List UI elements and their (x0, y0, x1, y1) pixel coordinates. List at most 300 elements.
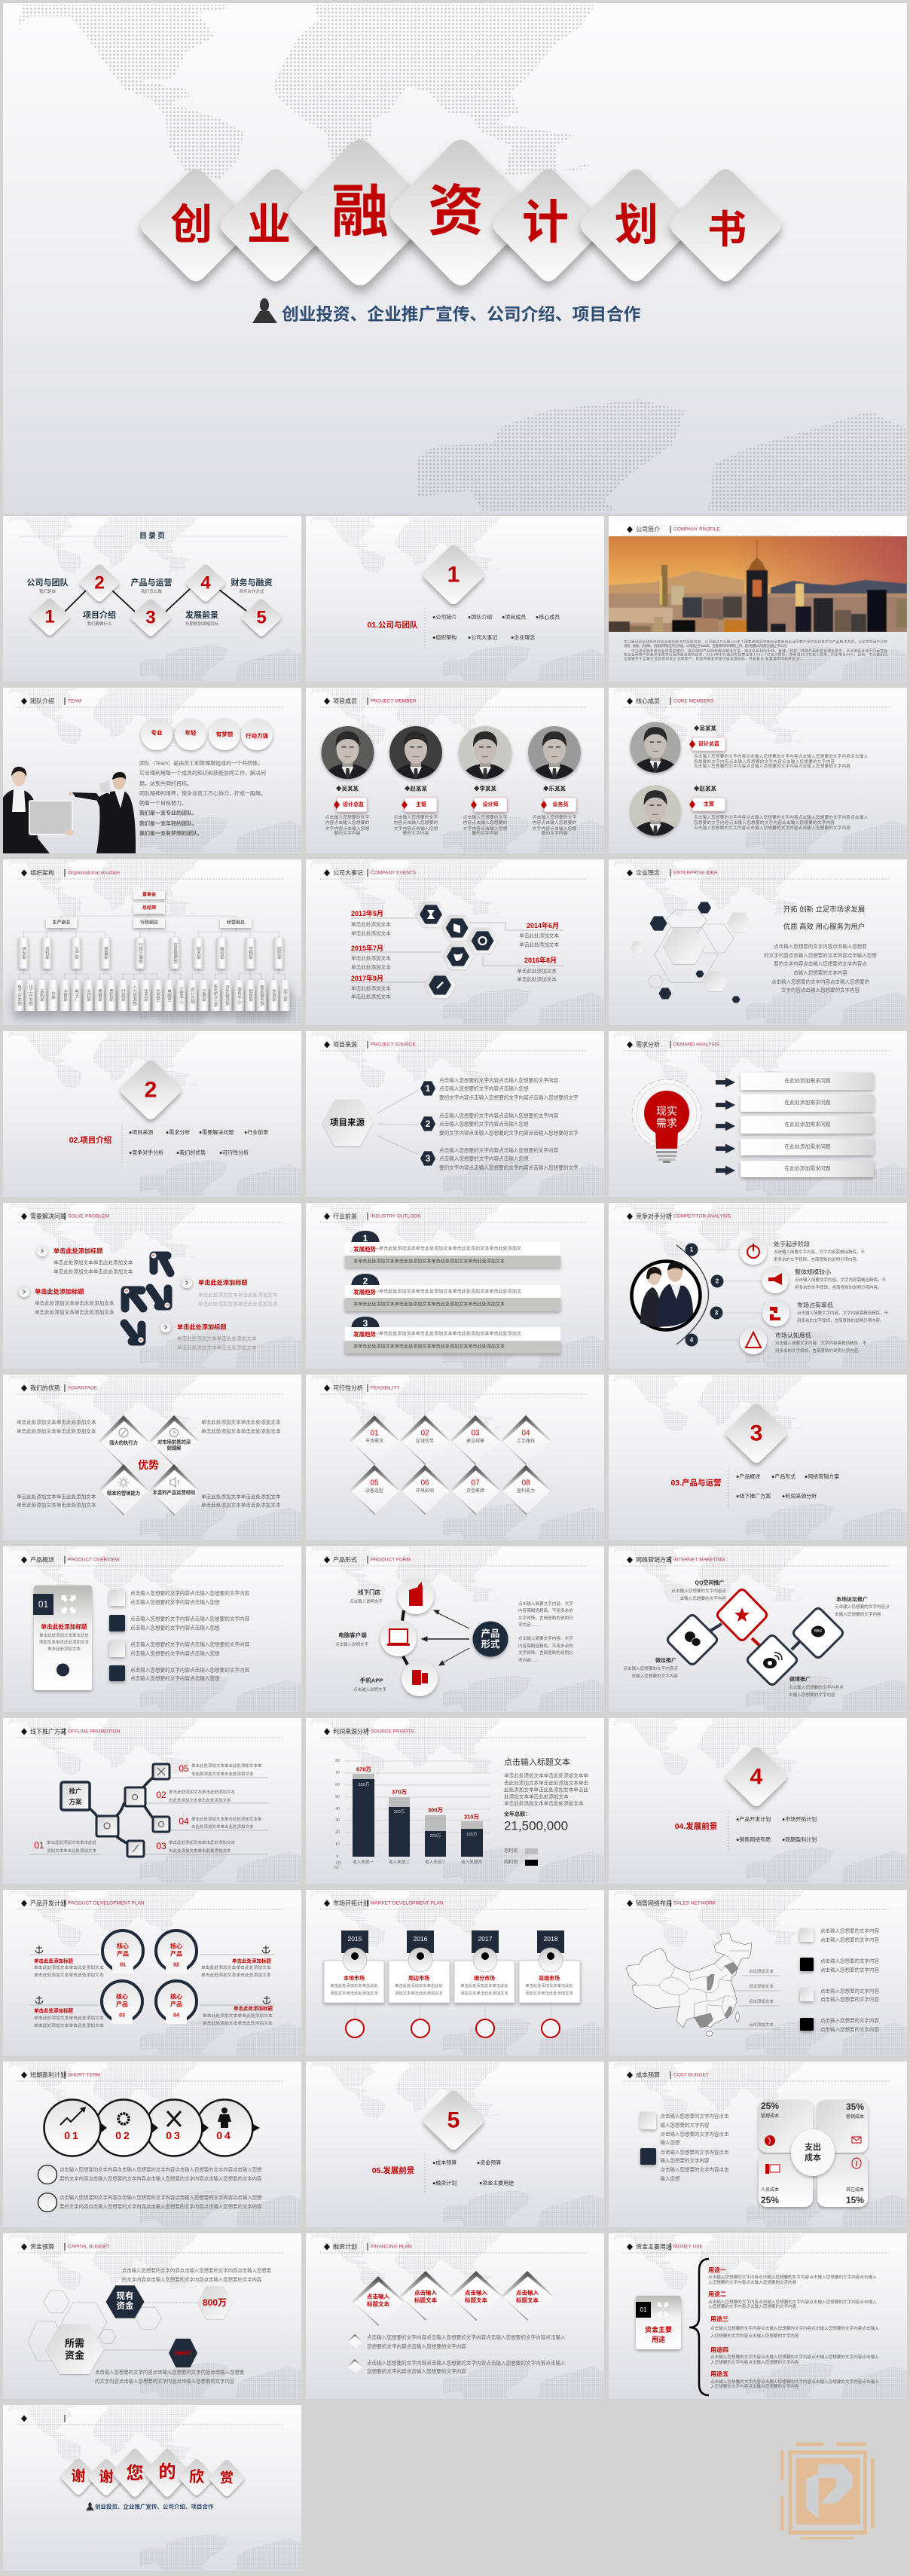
heading: 产品形式 (333, 1556, 357, 1564)
keyword circles: 专业 (151, 729, 163, 737)
heading (623, 869, 890, 879)
heading: COMPANY EVENTS (371, 871, 417, 875)
panel: feasibility (306, 1375, 604, 1540)
panel: market development plan (306, 1890, 604, 2056)
bar chart: 70 (335, 1771, 340, 1775)
heading: INDUSTRY OUTLOOK (371, 1214, 421, 1219)
photo: city skyline at sunset (609, 536, 907, 632)
market texts: 添加文本单击此处添加文本 (395, 1990, 443, 1996)
competitor texts: 点击输入简要文字内容。文字内容需概括精炼，不 (797, 1310, 889, 1316)
map callouts (714, 1968, 780, 2029)
competitor texts: 用多余的文字修饰，言简意赅的说明分项内容。 (795, 1284, 882, 1290)
team description: 它合理利用每一个成员的知识和技能协同工作，解决问 (139, 770, 266, 776)
bar chart: 300万 (428, 1806, 444, 1814)
numbered texts: 01 (34, 1840, 44, 1851)
heading: 线下推广方案 (30, 1728, 66, 1735)
bar chart: 50 (335, 1795, 340, 1799)
department labels: 行政人事部 (138, 942, 143, 965)
advantage labels: 丰富的产品运营经验 (153, 1488, 196, 1496)
panel: financing plan (306, 2233, 604, 2399)
center circle: 支出 (805, 2141, 821, 2152)
outlined diamonds (667, 1590, 843, 1685)
demand arrows (716, 1077, 735, 1176)
annual total (504, 1811, 568, 1833)
plan texts: 单击此处添加文本单击此处添加文本 (34, 1972, 104, 1978)
sub department labels (17, 984, 288, 1007)
year tags: 2015 (348, 1935, 362, 1943)
heading: ADVANTAGE (68, 1386, 98, 1390)
source lines (377, 1090, 419, 1155)
member one: 您想要的文字内容点击输入您想要的文字内容点击输入您想要的文字内容 (694, 758, 835, 765)
product card (33, 1586, 92, 1690)
heading (623, 1556, 890, 1566)
numbered hexagons: 1 (426, 1083, 431, 1094)
legend texts: 输入您想 (660, 2175, 680, 2181)
member one: 点击输入您想要的文字内容点击输入您想要的文字内容点击输入您想要的文字内容 (694, 763, 850, 769)
heading: 核心成员 (636, 697, 660, 705)
numbered dots: 2 (716, 1277, 719, 1285)
cost labels (761, 2101, 864, 2205)
outlook row 3: 本单击此处添加文本单击此处添加文本单击此处添加文本单击此处添加文本 (353, 1344, 505, 1350)
form description: 点击输入简要文字内容。文字 (518, 1601, 573, 1607)
year tags (341, 1930, 564, 1953)
feature texts: 点击输入您想要的文字内容点击输入您想 (130, 1624, 220, 1631)
feasibility labels: 04 (521, 1430, 530, 1437)
member names (336, 785, 566, 792)
plan notes: 要的文字内容点击输入您想要的文字内容点击输入您想要的文字内容点击输入您想要的文字内容 (60, 2175, 262, 2181)
section list: ●资金主要用途 (479, 2180, 514, 2186)
advantage descriptions: 单击此处添加文本单击此处添加文本 (201, 1428, 281, 1434)
role badges: 主管 (416, 801, 426, 807)
member names: ◆赵某某 (405, 785, 427, 792)
numbered hexagons: 3 (426, 1153, 431, 1164)
legend (504, 1848, 538, 1866)
advantage descriptions: 单击此处添加文本单击此处添加文本 (17, 1428, 96, 1434)
bar chart: 元） (334, 1866, 341, 1870)
title diamonds: 业 (247, 200, 291, 250)
cost labels: 管理成本 (761, 2113, 779, 2119)
existing capital hexagons: 资金 (116, 2300, 134, 2311)
chart description: 此处添加文本单击此处添加文本单击此 (504, 1787, 588, 1793)
panel: team (3, 688, 301, 853)
left events: 单击此处添加文本 (351, 955, 391, 961)
section list: ●成本预算 (432, 2159, 457, 2166)
outlook row 3: 发展趋势--单击此处添加文本单击此处添加文本单击此处添加文本单击此处添加文 (353, 1330, 521, 1338)
member two: 点击输入您想要的文字内容点击输入您想要的文字内容点击输入您想要的文字内容 (694, 825, 850, 831)
feasibility labels: 02 (420, 1430, 429, 1437)
plan texts: 单击此处添加文本单击此处添加文本 (34, 1964, 104, 1970)
marketing labels: 点击输入您想要的文字内容点 (671, 1588, 726, 1594)
sub department labels: 总务室 (155, 988, 160, 1002)
chapter labels (27, 577, 273, 627)
advantage labels: 精准的营销能力 (107, 1490, 140, 1496)
heading: PROJECT SOURCE (371, 1042, 416, 1047)
marketing labels (623, 1579, 890, 1698)
uses list: 点击输入您想要的文字内容点击输入您想要的文字内容点击输入您想要的文字内容点击输入 (708, 2274, 877, 2280)
sub department labels: 仓库 (50, 990, 56, 1000)
section list (432, 613, 560, 640)
section title: 03.产品与运营 (670, 1478, 722, 1488)
panel: offline promotion (3, 1718, 301, 1884)
marketing labels: 微博推广 (789, 1675, 811, 1683)
legend texts: 点击输入您想要的文字内容 (820, 1966, 880, 1973)
right events: 单击此处添加文本 (519, 942, 559, 948)
slogans: 优质 高效 用心服务为用户 (783, 922, 865, 931)
step circles (44, 2100, 260, 2156)
advantage descriptions: 单击此处添加文本单击此处添加文本 (17, 1419, 96, 1425)
panel: section 3 (609, 1375, 907, 1540)
heading: MARKET DEVELOPMENT PLAN (371, 1901, 444, 1906)
heading: 成本预算 (636, 2071, 660, 2079)
sub department labels: 会计出纳 (190, 986, 195, 1005)
center circle: 形式 (481, 1638, 500, 1650)
section list: ●资金预算 (477, 2159, 501, 2166)
chart description (504, 1772, 588, 1806)
map of China (626, 1934, 752, 2036)
center circle: 产品 (481, 1628, 500, 1639)
idea description: 文字内容点击输入您想要的文字内容 (781, 987, 860, 993)
advantage labels: 对市场前景的深 (157, 1439, 191, 1445)
uses list: 用途三 (710, 2315, 728, 2323)
member one: 设计总监 (698, 740, 719, 747)
market texts: 细分市场 (474, 1975, 495, 1981)
competitor texts (774, 1240, 889, 1354)
core product circles: 产品 (170, 2001, 182, 2008)
product card: 添加文本单击此处添加文本 (39, 1639, 89, 1645)
competitor texts: 点击输入简要文字内容。文字内容需概括精炼，不 (795, 1277, 887, 1283)
feasibility labels: 环境影响 (416, 1488, 434, 1494)
heading (320, 1041, 587, 1051)
plan texts: 单击此处添加标题 (234, 2005, 273, 2011)
existing capital hexagons (105, 2285, 232, 2319)
section list: ●项目成员 (502, 613, 526, 621)
panel: product overview (3, 1546, 301, 1712)
heading (320, 2243, 587, 2253)
numbered texts: 05 (179, 1763, 189, 1774)
heading: Organizational structure (68, 871, 120, 875)
section title: 04.发展前景 (675, 1821, 717, 1831)
numbered diamonds: 4 (200, 572, 211, 594)
heading (17, 1384, 284, 1394)
top level boxes (46, 891, 252, 928)
feasibility labels: 01 (370, 1430, 379, 1437)
role badges: 业务员 (553, 801, 568, 807)
form description: 文字修饰。言简意赅的说明分 (518, 1615, 573, 1621)
bar chart: 收入来源一 (353, 1859, 374, 1865)
source texts: 点击输入您想要的文字内容点击输入您想要的文字内容 (439, 1112, 559, 1119)
capital descriptions: 点击输入您想要的文字内容点击输入您想要的文字内容点击输入您想要 (122, 2267, 272, 2273)
required capital hexagons: 2000万 (174, 2350, 193, 2356)
section list: ●市场开拓计划 (782, 1815, 817, 1823)
member descriptions: 点击输入您想要的文字 (325, 814, 370, 820)
numbered texts: 04 (179, 1816, 189, 1827)
team description: 朝着一个目标努力。 (139, 800, 187, 806)
financing labels: 点击输入 (414, 2288, 437, 2296)
department labels: 质量部 (103, 946, 108, 960)
chart description: 单击此处添加文本单击此处添加文本 (504, 1800, 584, 1806)
bar chart: 30 (335, 1818, 340, 1823)
feature texts: 点击输入您想要的文字内容点击输入您想要的文字内容 (130, 1641, 250, 1648)
use card (636, 2296, 681, 2349)
advantage descriptions (17, 1419, 281, 1508)
bar chart (334, 1759, 490, 1870)
advantage center label: 优势 (138, 1459, 159, 1471)
hexagon: project source (322, 1100, 372, 1146)
heading: 企业理念 (636, 869, 660, 877)
left events: 单击此处添加文本 (351, 929, 391, 937)
keyword circles: 行动力强 (246, 732, 268, 740)
heading: 行业前景 (333, 1213, 357, 1220)
member descriptions: 点击输入您想要的文字 (394, 814, 438, 820)
chapter labels: 公司与团队 (27, 577, 68, 588)
section title: 05.发展前景 (372, 2165, 414, 2175)
uses list: 用途四 (710, 2346, 728, 2353)
form description (518, 1601, 573, 1663)
chart description: 处添加文本单击此处添加文本 (504, 1793, 569, 1800)
numbered hexagons: 2 (426, 1119, 431, 1129)
legend: 纯利润 (504, 1859, 518, 1865)
department labels: 资料部 (44, 946, 50, 960)
sub department labels: 电子开发部 (17, 984, 22, 1007)
company description: 中兴通讯是全球领先的综合通信解决方案提供商。公司通过为全球160多个国家和地区的电信运营商和企业网客户提供创新技术与产品解决方案，让全世界用户享有 (624, 639, 887, 645)
icon: watermark stamp (780, 2443, 875, 2539)
role badges (334, 798, 576, 812)
numbered dots: 1 (690, 1246, 694, 1253)
financing labels: 点击输入 (367, 2293, 389, 2300)
heading (623, 1213, 890, 1222)
feature texts: 点击输入您想要的文字内容点击输入您想要的文字内容 (130, 1666, 250, 1674)
member names: ◆吴某某 (336, 785, 359, 792)
panel: competitor analysis (609, 1203, 907, 1369)
plan texts: 单击此处添加文本单击此处添加文本 (34, 2015, 104, 2021)
red rings (346, 2003, 560, 2037)
heading (623, 526, 890, 536)
bar chart: （万 (334, 1861, 341, 1866)
legend texts: 点击输入您想要的文字内容点击 (660, 2166, 729, 2172)
source texts: 点击输入您想要的文字内容点击输入您想 (439, 1155, 529, 1161)
rule lines (29, 1778, 268, 1854)
problem item 2: 单击此处添加标题 (35, 1288, 84, 1296)
diamond number 4 (726, 1747, 786, 1806)
legend texts (820, 1927, 880, 2032)
member descriptions: 点击输入您想要的文字 (463, 814, 508, 820)
step icons (60, 2107, 231, 2128)
problem item 2 (19, 1286, 115, 1315)
market texts: 添加文本单击此处添加文本 (460, 1990, 508, 1996)
panel: sales network (609, 1890, 907, 2056)
market texts: 单击此处添加文本单击此处 (460, 1982, 508, 1988)
member descriptions: 要的文字内容 (402, 830, 429, 836)
heading: OFFLINE PROMOTION (68, 1729, 121, 1734)
form labels: 手机APP (360, 1677, 383, 1684)
idea description: 要的文字内容点击输入您想要的文字内容点 (774, 960, 867, 967)
connection arc (676, 1245, 763, 1344)
heading: 组织架构 (30, 869, 54, 877)
social icons (685, 1607, 825, 1668)
financing descriptions: 点击输入您想要的文字内容点击输入您想要的文字内容点击输入您想要的文字内容点击输入 (367, 2333, 566, 2341)
diamond number 4: 4 (750, 1764, 763, 1790)
core product circles: 核心 (116, 1993, 128, 2001)
cost labels: 25% (761, 2101, 779, 2111)
member descriptions: 要的文字内容 (541, 830, 568, 836)
curved connectors (87, 1777, 154, 1845)
market texts (330, 1975, 573, 1996)
icon nodes (96, 1764, 169, 1857)
heading: CORE MEMBERS (673, 699, 714, 704)
step numbers: 01 (64, 2129, 81, 2141)
anchor icons (35, 1946, 270, 2004)
market cards (324, 1961, 580, 2003)
light bulb: 需求 (656, 1117, 677, 1129)
plan texts: 单击此处添加文本单击此处添加文本 (34, 2022, 104, 2028)
heading: 资金预算 (30, 2243, 54, 2251)
bar chart: 40 (335, 1807, 340, 1811)
section list: ●短期盈利计划 (782, 1836, 817, 1842)
numbered diamonds: 1 (44, 607, 55, 627)
plan texts: 单击此处添加文本单击此处添加文本 (203, 2013, 273, 2019)
feature squares (109, 1590, 125, 1681)
sub department labels: 股份制办公室 (213, 984, 218, 1007)
member descriptions: 内容点击输入您想要的 (533, 819, 577, 826)
heading: 需要解决问题 (30, 1213, 66, 1220)
heading: 产品开发计划 (30, 1900, 66, 1907)
feasibility labels: 05 (370, 1479, 379, 1487)
advantage labels: 刻理解 (167, 1445, 182, 1451)
panel: organizational structure (3, 859, 301, 1025)
marketing labels: 点击输入您想要的文字内容点 (835, 1604, 890, 1610)
legend squares (800, 1928, 814, 2031)
heading: SHORT-TERM (68, 2073, 100, 2077)
diamond number 2: 2 (145, 1077, 157, 1103)
uses list (708, 2266, 879, 2389)
four cost panels (759, 2100, 868, 2207)
feasibility diamonds (350, 1415, 551, 1515)
department labels: 信息管理部 (173, 942, 178, 965)
existing capital hexagons: 现有 (116, 2291, 134, 2301)
section list: ●公司简介 (432, 613, 457, 621)
year tags: 2017 (478, 1935, 493, 1943)
heading: 团队介绍 (30, 697, 54, 705)
plan texts: 单击此处添加文本单击此处添加文本 (203, 2020, 273, 2026)
thanks diamonds: 您 (127, 2463, 143, 2483)
member portraits (321, 726, 581, 804)
team description (139, 759, 266, 836)
left events: 2013年5月 (351, 909, 383, 917)
competitor texts: 点击输入简要文字内容。文字内容需概括精炼，不 (775, 1340, 867, 1346)
heading (17, 869, 284, 879)
feature texts: 点击输入您想要的文字内容点击输入您想 (130, 1598, 220, 1606)
section list (129, 1128, 268, 1155)
org connector lines (19, 899, 285, 980)
problem item 1: 单击此处添加文本单击此处添加文本 (53, 1259, 133, 1265)
panel: core members (609, 688, 907, 860)
form labels: 点击输入说明文字 (350, 1598, 383, 1604)
problem item 4 (160, 1322, 257, 1351)
company description (624, 639, 887, 661)
heading: PRODUCT FORM (371, 1558, 411, 1562)
uses list: 入您想要的文字内容点击输入您想要的文字内容 (708, 2303, 797, 2309)
panel: advantage (3, 1375, 301, 1540)
numbered red dots: 04 (139, 1338, 142, 1341)
feasibility labels: 盈利能力 (517, 1488, 535, 1494)
heading: SALES NETWORK (673, 1901, 716, 1906)
heading (320, 1213, 587, 1222)
team description: 我们是一支有梦想的团队。 (139, 830, 203, 836)
outlook row 3 (345, 1317, 560, 1354)
title diamonds: 创 (170, 200, 212, 249)
heading: COMPANY PROFILE (673, 527, 721, 532)
legend texts: 点击输入您想要的文字内容 (820, 1996, 880, 2002)
feature texts: 点击输入您想要的文字内容点击输入您想 (130, 1650, 220, 1657)
heading: 可行性分析 (333, 1384, 363, 1392)
market texts: 添加文本单击此处添加文本 (525, 1990, 573, 1996)
member two: ◆赵某某 (694, 785, 716, 792)
numbered diamonds: 3 (145, 607, 156, 628)
member descriptions: 要的文字内容 (472, 830, 499, 836)
use card: 资金主要 (645, 2325, 672, 2333)
icons in diamonds (118, 1428, 179, 1488)
legend texts: 点击输入您想要的文字内容 (820, 2017, 880, 2023)
market texts: 单击此处添加文本单击此处 (525, 1982, 573, 1988)
existing capital hexagons: 800万 (203, 2297, 227, 2308)
member two: 您想要的文字内容点击输入您想要的文字内容点击输入您想要的文字内容 (694, 819, 835, 826)
bar chart: 370万 (392, 1788, 408, 1796)
legend texts: 点击输入您想要的文字内容 (820, 1936, 880, 1943)
heading (17, 1556, 284, 1566)
numbered texts: 添加文本单击此处添加文本 (47, 1848, 97, 1854)
title diamonds: 计 (522, 197, 569, 249)
title diamonds: 书 (707, 209, 747, 252)
problem item 2: 单击此处添加文本单击此处添加文本 (35, 1300, 115, 1306)
heading: 项目成员 (333, 697, 357, 705)
panel: capital budget (3, 2233, 301, 2399)
legend texts: 输入您想要的文字内容 (660, 2157, 710, 2163)
year tags: 2018 (544, 1935, 558, 1943)
map callouts: 点击添加文本 (749, 1998, 774, 2004)
sub department labels: 文管中心 (179, 986, 184, 1004)
heading: COMPETITOR ANALYSIS (673, 1214, 731, 1219)
market texts: 周边市场 (408, 1975, 429, 1981)
member names: ◆李某某 (474, 785, 496, 792)
main node: 推广 (69, 1787, 82, 1795)
member descriptions: 要的文字内容 (334, 830, 361, 836)
heading (17, 697, 284, 707)
thanks diamonds: 欣 (189, 2468, 204, 2486)
heading: 利润来源分析 (333, 1728, 369, 1735)
ring connectors (343, 1948, 563, 1972)
competitor texts: 用多余的文字修饰，言简意赅的说明分项内容。 (774, 1256, 861, 1262)
numbered hexagons (420, 1081, 435, 1166)
bar chart: 80 (335, 1759, 340, 1763)
chapter labels: 财务与融资 (231, 577, 273, 588)
sub department labels: 商务中心 (237, 986, 242, 1004)
financing labels: 标题文本 (414, 2296, 437, 2303)
heading: 需求分析 (636, 1041, 660, 1048)
marketing labels: 微信推广 (655, 1657, 676, 1663)
small diamonds (347, 2334, 362, 2374)
social icons: BBS (814, 1629, 823, 1634)
plan texts: 单击此处添加文本单击此处添加文本 (201, 1972, 271, 1978)
idea description: 的文字内容点击输入您想要的文字内容点击输入您想 (764, 952, 877, 958)
feasibility labels: 08 (521, 1479, 530, 1487)
advantage descriptions: 单击此处添加文本单击此处添加文本 (201, 1419, 281, 1425)
plan notes (38, 2165, 262, 2211)
bar chart: 320万 (394, 1809, 405, 1814)
plan texts: 单击此处添加标题 (34, 2007, 74, 2014)
panel: demand analysis (609, 1031, 907, 1197)
member descriptions: 内容点击输入您想要的 (394, 819, 438, 826)
feature texts: 点击输入您想要的文字内容点击输入您想要的文字内容 (130, 1589, 250, 1597)
